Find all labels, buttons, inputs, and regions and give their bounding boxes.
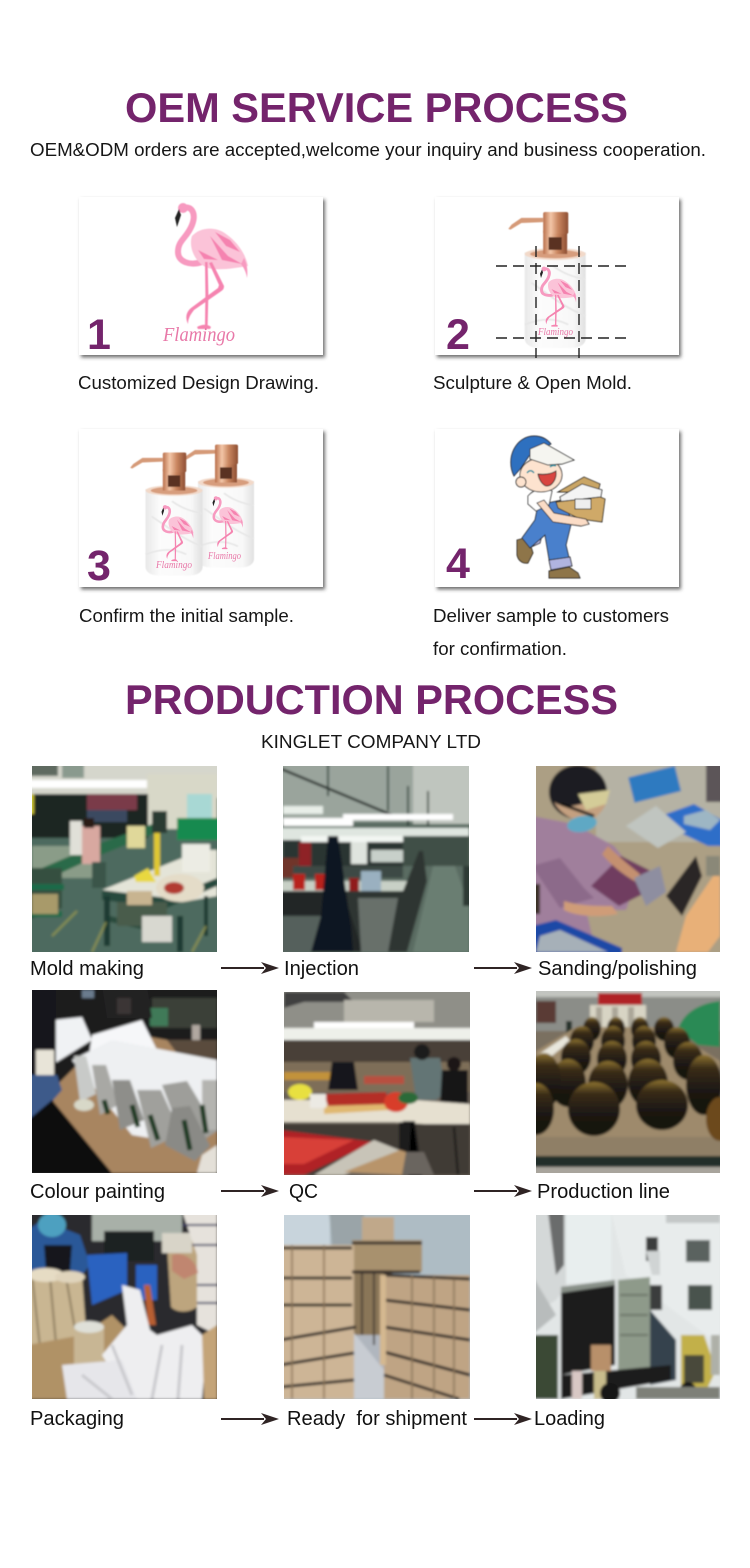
caption row 1 with arrows: [30, 958, 697, 980]
icon: flamingo drawing: [175, 203, 248, 329]
mold guide dashed lines: [496, 246, 627, 358]
icon: two sample bottles: [130, 445, 254, 576]
caption row 2 with arrows: [30, 1181, 670, 1203]
arrow: [221, 962, 279, 974]
photo: loading: [536, 1215, 720, 1399]
icon: two sample bottles: Flamingo: [155, 559, 192, 571]
label: QC: QC: [289, 1181, 318, 1203]
label: packaging: Packaging: [30, 1408, 124, 1430]
icon: pump bottle with flamingo: Flamingo: [537, 327, 573, 338]
photo: ready for shipment: [284, 1215, 470, 1399]
panel: step 3 initial sample: [79, 429, 323, 590]
step number 2: 2: [446, 311, 470, 359]
icon: delivery worker carrying boxes: [511, 436, 605, 578]
step number 1: 1: [87, 311, 111, 359]
caption: step 2: Sculpture & Open Mold.: [433, 373, 632, 393]
caption: step 4: for confirmation.: [433, 639, 567, 659]
arrow: [221, 1185, 279, 1197]
caption: step 4: Deliver sample to customers: [433, 606, 669, 626]
label: loading: Loading: [534, 1408, 605, 1430]
arrow: [474, 1413, 532, 1425]
photo: colour painting: [32, 990, 217, 1173]
label: colour painting: Colour painting: [30, 1181, 165, 1203]
arrow: [221, 1413, 279, 1425]
photo: QC: [284, 992, 470, 1175]
caption: step 3: Confirm the initial sample.: [79, 606, 294, 626]
step number 3: 3: [87, 542, 111, 590]
panel: step 1 design drawing: [79, 197, 323, 359]
subtitle: OEM&ODM orders are accepted,welcome your inquiry and business cooperation.: [30, 140, 706, 160]
caption: step 4: [433, 606, 669, 659]
photo: packaging: [32, 1215, 217, 1399]
photo: sanding and polishing: [536, 766, 720, 952]
label: injection: Injection: [284, 958, 359, 980]
icon: pump bottle with flamingo: [508, 212, 586, 348]
label: mold making: Mold making: [30, 958, 144, 980]
photo: production line: [536, 991, 720, 1173]
panel: step 4 delivery: [435, 429, 679, 588]
caption: step 1: Customized Design Drawing.: [78, 373, 319, 393]
company name: KINGLET COMPANY LTD: [261, 732, 481, 752]
label: sanding/polishing: Sanding/polishing: [538, 958, 697, 980]
flamingo script lettering: Flamingo: [162, 324, 235, 346]
title: OEM service process: OEM SERVICE PROCESS: [125, 84, 628, 131]
caption row 3 with arrows: [30, 1408, 605, 1430]
arrow: [474, 1185, 532, 1197]
label: production line: Production line: [537, 1181, 670, 1203]
panel: step 2 sculpture and mold: [435, 197, 679, 359]
arrow: [474, 962, 532, 974]
title: production process: PRODUCTION PROCESS: [125, 676, 618, 723]
label: ready for shipment: Ready for shipment: [287, 1408, 467, 1430]
photo: mold making: [32, 766, 217, 952]
icon: two sample bottles: Flamingo: [207, 550, 241, 562]
step number 4: 4: [446, 540, 470, 588]
photo: injection: [283, 766, 469, 952]
